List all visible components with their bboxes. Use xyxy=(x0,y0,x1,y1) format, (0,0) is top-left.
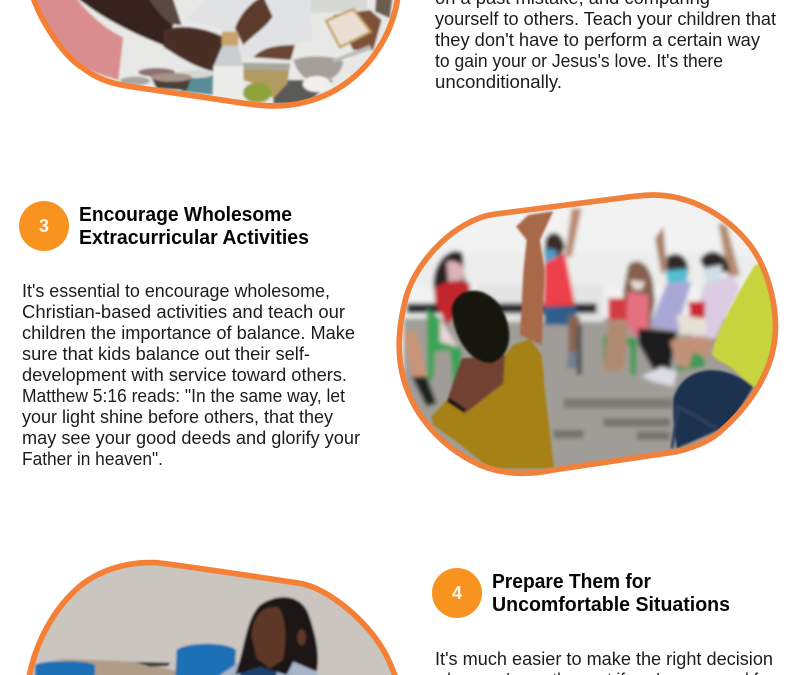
heading: Prepare Them for Uncomfortable Situations: Prepare Them for xyxy=(492,571,651,593)
text block: item 3 body: It's essential to encourage wholesome, xyxy=(22,281,330,301)
text block: item 4 body: It's much easier to make the right decision xyxy=(435,649,773,669)
text block: item 2 body continued: to gain your or Jesus's love. It's there xyxy=(435,51,723,71)
text block: item 2 body continued: they don't have to perform a certain way xyxy=(435,30,760,50)
foreground girl: skin of back and neck xyxy=(447,355,505,415)
badge: number 3: 3 xyxy=(39,216,49,236)
text block: item 3 body: Father in heaven". xyxy=(22,449,163,469)
heading: Prepare Them for Uncomfortable Situations: Uncomfortable Situations xyxy=(492,594,730,616)
heading: Encourage Wholesome Extracurricular Activities: Encourage Wholesome xyxy=(79,204,292,226)
text block: item 2 body continued: yourself to others. Teach your children that xyxy=(435,9,776,29)
text block: item 3 body: sure that kids balance out their self- xyxy=(22,344,310,364)
foreground girl: shirt xyxy=(432,339,554,468)
panel: photo of children raising hands xyxy=(390,185,790,478)
child in pink dress xyxy=(623,261,655,337)
foreground girl: hair xyxy=(452,291,509,363)
foreground girl: arm xyxy=(516,211,553,345)
adult in yellow sweater xyxy=(712,262,778,392)
text block: item 3 body: children the importance of balance. Make xyxy=(22,323,355,343)
child in lilac top xyxy=(718,223,740,278)
badge: number 4 xyxy=(432,568,482,618)
text block: item 3 body: may see your good deeds and glorify your xyxy=(22,428,360,448)
text block: item 2 body continued xyxy=(435,0,776,92)
heading: Prepare Them for Uncomfortable Situations xyxy=(492,571,730,616)
panel: photo of family at breakfast table xyxy=(20,0,413,113)
text block: item 3 body xyxy=(22,281,360,469)
text block: item 3 body: development with service toward others. xyxy=(22,365,347,385)
text block: item 3 body: Matthew 5:16 reads: "In the same way, let xyxy=(22,386,345,406)
heading: Encourage Wholesome Extracurricular Activities: Extracurricular Activities xyxy=(79,227,309,249)
heading: Encourage Wholesome Extracurricular Activities xyxy=(79,204,309,249)
panel: photo of girl at classroom desk xyxy=(20,557,407,675)
badge: number 4: 4 xyxy=(452,583,462,603)
text block: item 3 body: your light shine before others, that they xyxy=(22,407,333,427)
text block: item 3 body: Christian-based activities and teach our xyxy=(22,302,345,322)
text block: item 2 body continued: unconditionally. xyxy=(435,72,562,92)
child in floral top xyxy=(655,227,667,275)
badge: number 3 xyxy=(19,201,69,251)
child in red shirt centre xyxy=(565,208,582,257)
girl in red at left xyxy=(430,248,472,293)
